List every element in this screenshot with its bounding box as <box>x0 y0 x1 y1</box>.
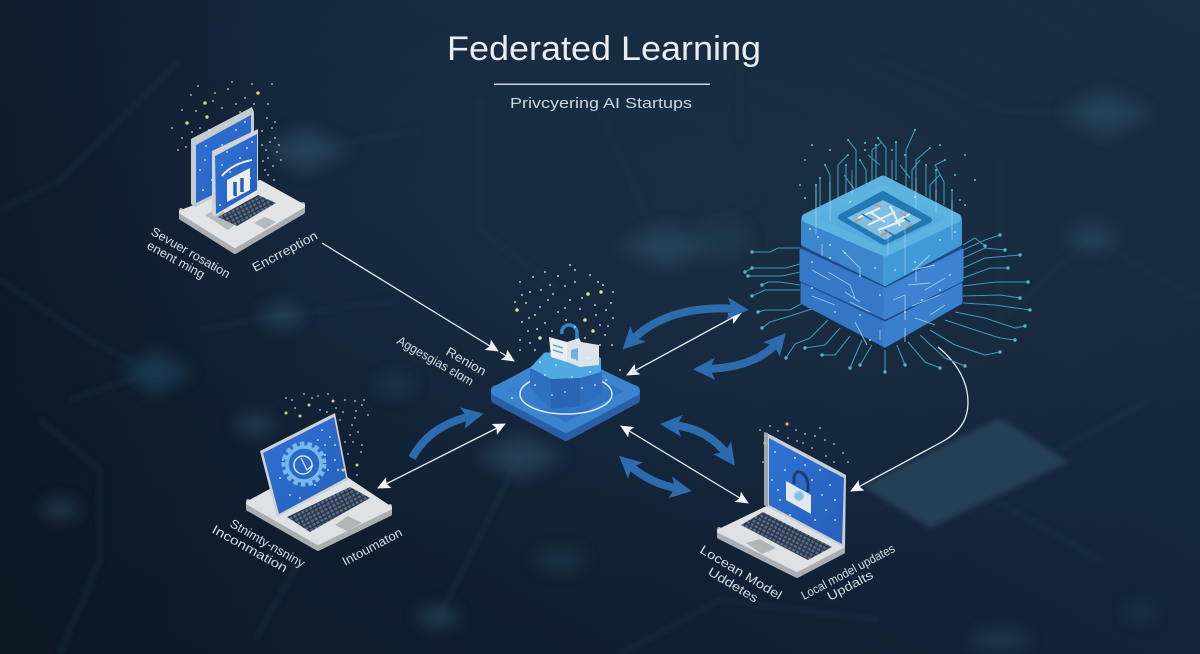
octagon drum <box>530 352 602 409</box>
lock icon on tablet <box>222 160 252 202</box>
arrow: hub to server <box>627 313 741 375</box>
curved arrow: left laptop to hub <box>412 416 472 458</box>
shackle and document icon <box>549 325 599 367</box>
arrow: hub to laptop right <box>621 426 748 503</box>
curved arrow: hub to right laptop lower <box>628 464 680 489</box>
curved blue exchange arrows <box>412 308 778 489</box>
label: inconmation: Inconmation <box>210 522 290 575</box>
base <box>248 478 390 549</box>
keyboard <box>741 512 832 560</box>
bottom layer <box>803 284 960 345</box>
separator <box>801 247 962 286</box>
front tablet <box>212 129 258 217</box>
screen <box>764 432 846 548</box>
gear icon <box>284 444 324 484</box>
label: encryption: Encrreption <box>250 228 320 275</box>
base <box>719 508 843 576</box>
trackpad <box>254 217 276 229</box>
keyboard <box>287 487 370 532</box>
curved arrow: server to hub lower <box>705 342 778 369</box>
device: server stack <box>745 130 1030 372</box>
label: aggregate: Aggesgias ɛlɑm <box>394 333 476 389</box>
side circuit lines <box>812 244 945 345</box>
arrow: tablets to hub <box>322 243 498 351</box>
labels: hub <box>394 333 489 389</box>
device: left laptop <box>248 394 390 549</box>
label: local model: Locean Model <box>697 543 784 602</box>
label: information: Intoumaton <box>340 525 405 569</box>
labels: left laptop <box>210 516 405 575</box>
middle layer <box>801 250 962 318</box>
device: right laptop <box>719 424 848 576</box>
arrow: second head to hub <box>500 352 514 361</box>
label: updates left: Uddetes <box>705 565 761 605</box>
base plate <box>181 182 303 252</box>
back tablet <box>191 107 254 207</box>
ring <box>520 374 612 414</box>
arrow: laptop left to hub <box>378 424 505 488</box>
platform <box>496 356 635 436</box>
data particles <box>760 424 848 520</box>
node dots <box>810 197 955 340</box>
device: central aggregation hub <box>496 265 635 436</box>
connector arrows <box>322 243 968 503</box>
trackpad <box>335 516 362 531</box>
top layer <box>803 180 960 284</box>
label: local model updates: Local model updates <box>799 541 897 603</box>
circuit chip core <box>847 200 922 240</box>
curved arrow: hub to server upper <box>631 308 737 341</box>
recessed core <box>841 194 929 242</box>
data particles <box>172 82 281 205</box>
arrow: server to laptop right <box>851 347 968 491</box>
title divider <box>494 84 710 85</box>
separator <box>801 281 962 320</box>
data particles <box>512 265 620 398</box>
device: tablets on base <box>172 82 303 252</box>
trackpad <box>746 539 776 554</box>
data particles <box>280 394 368 498</box>
label: secure rotation: Sevuer rosation <box>148 224 233 281</box>
padlock icon <box>786 472 811 514</box>
title: Federated Learning <box>447 30 761 68</box>
labels: tablets <box>145 224 320 282</box>
keyboard <box>218 195 276 226</box>
labels: right laptop <box>697 541 897 605</box>
screen <box>260 413 348 517</box>
label: event ring: enent ming <box>145 238 207 282</box>
label: renion: Renion <box>444 344 489 379</box>
label: strinty-nsniny: Stnimty-nsniny <box>228 516 308 571</box>
curved arrow: hub to right laptop upper <box>672 425 728 456</box>
falling trace lines on rim <box>816 170 952 275</box>
label: updates right: Updalts <box>825 568 876 604</box>
circuit traces <box>745 130 1030 372</box>
subtitle: Privcyering AI Startups <box>510 95 692 112</box>
